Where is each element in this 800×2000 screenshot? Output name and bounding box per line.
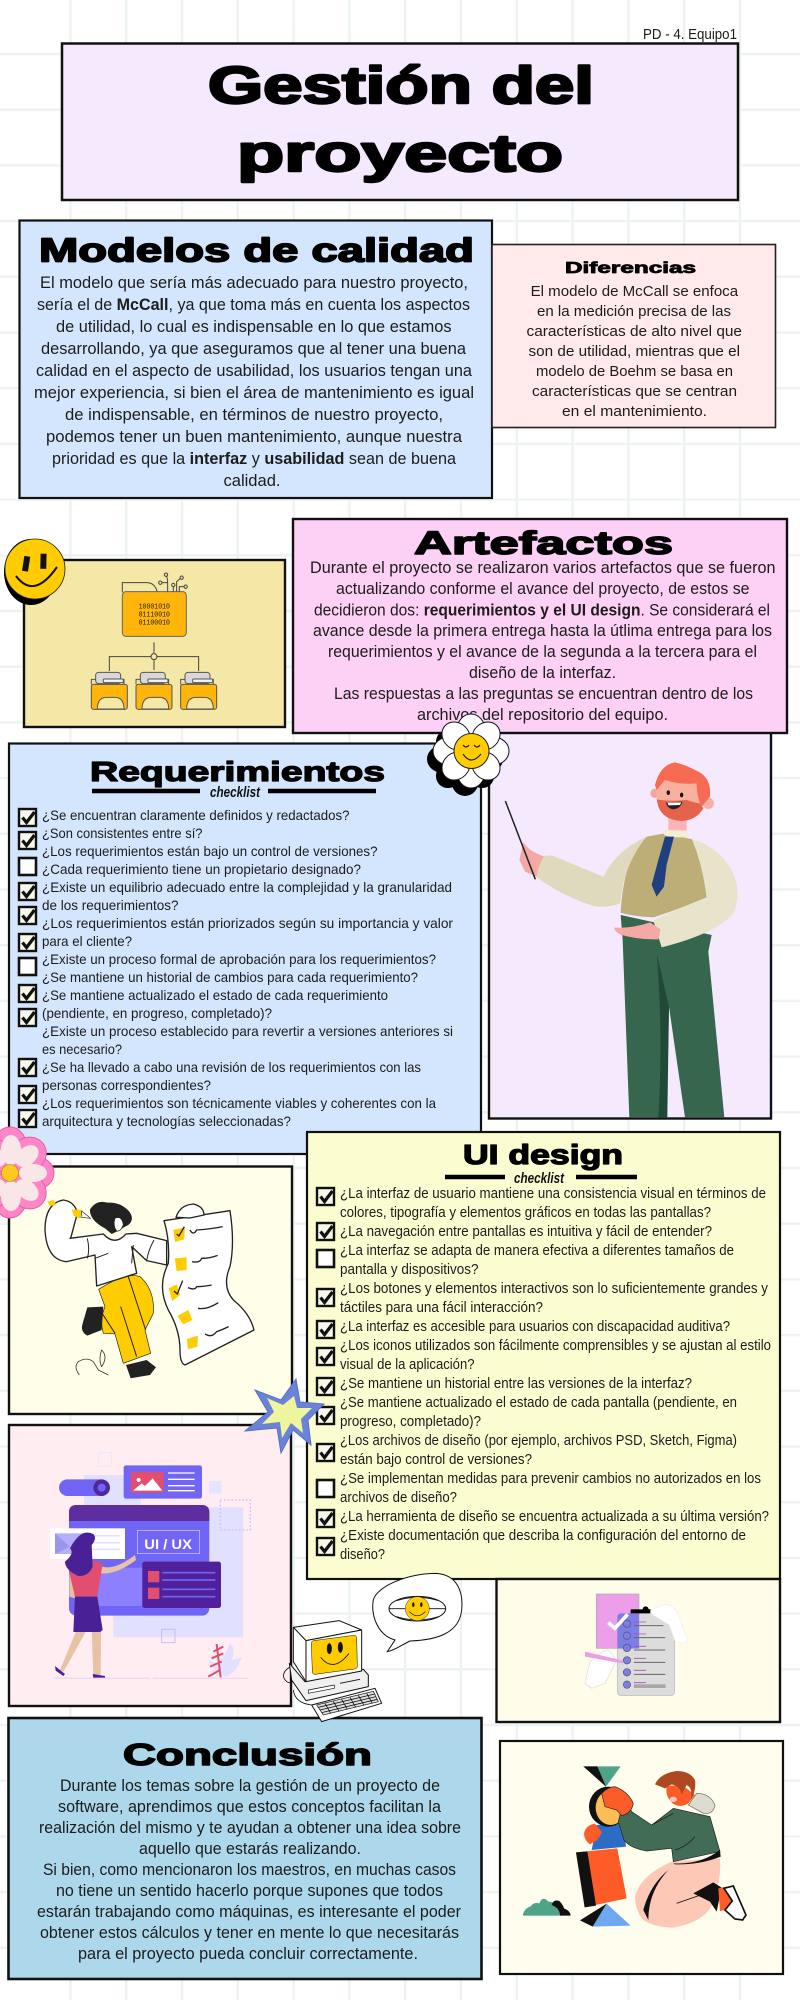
text block: modelos: desarrollando, ya que aseguramos que al tener una buena — [41, 340, 467, 358]
icon: retro computer — [284, 1621, 382, 1722]
checklist text: ¿Se encuentran claramente definidos y redactados? — [42, 808, 350, 823]
illustration: man with pointer — [505, 762, 737, 1117]
checklist text: de los requerimientos? — [42, 898, 179, 913]
illustration: woman with checklist — [45, 1200, 254, 1378]
checklist text: ¿Los requerimientos son técnicamente viables y coherentes con la — [42, 1096, 436, 1111]
icon: smiley sticker — [4, 539, 65, 605]
text block: modelos: El modelo que sería más adecuado para nuestro proyecto, — [40, 274, 468, 292]
text block: modelos: podemos tener un buen mantenimiento, aunque nuestra — [46, 428, 463, 446]
text block: conclusion — [37, 1777, 461, 1963]
checklist text: ¿Se mantiene actualizado el estado de cada pantalla (pendiente, en — [340, 1395, 737, 1411]
checklist text: progreso, completado)? — [340, 1414, 481, 1430]
text block: modelos: prioridad es que la interfaz y usabilidad sean de buena — [52, 450, 457, 468]
text block: conclusion: Si bien, como mencionaron los maestros, en muchas casos — [43, 1861, 456, 1879]
text block: artefactos — [310, 559, 776, 724]
text block: diferencias: en la medición precisa de las — [537, 303, 731, 320]
checklist text: pantalla y dispositivos? — [340, 1262, 478, 1278]
text block: conclusion: aquello que estarás realizando. — [139, 1840, 361, 1858]
checklist text: personas correspondientes? — [42, 1078, 211, 1093]
checklist text: ¿Son consistentes entre sí? — [42, 826, 203, 841]
icon: folder tree: 01100010 — [139, 619, 170, 627]
title — [208, 57, 594, 183]
heading: conclusion: Conclusión — [123, 1737, 372, 1772]
icon: white flower sticker — [427, 714, 509, 796]
text block: modelos: sería el de McCall, ya que toma más en cuenta los aspectos — [37, 296, 470, 314]
checklist text: ¿La interfaz es accesible para usuarios con discapacidad auditiva? — [340, 1319, 730, 1335]
checklist text: arquitectura y tecnologías seleccionadas? — [42, 1114, 291, 1129]
text block: diferencias: en el mantenimiento. — [562, 403, 707, 420]
panel: conclusion — [8, 1718, 482, 1979]
checklist text: ¿Los requerimientos están bajo un control de versiones? — [42, 844, 378, 859]
text block: artefactos: Durante el proyecto se realizaron varios artefactos que se fueron — [310, 559, 776, 577]
heading: diferencias: Diferencias — [565, 260, 696, 277]
text block: modelos: de indispensable, en términos de nuestro proyecto, — [65, 406, 443, 424]
panel: pink ui/ux illustration — [9, 1425, 291, 1706]
checklist text: ¿Los archivos de diseño (por ejemplo, archivos PSD, Sketch, Figma) — [340, 1433, 737, 1449]
checklist text: (pendiente, en progreso, completado)? — [42, 1006, 272, 1021]
checklist text: para el cliente? — [42, 934, 132, 949]
text block: diferencias — [526, 283, 742, 420]
panel: requerimientos checklist — [9, 744, 481, 1154]
icon: folder tree — [91, 573, 217, 709]
checklist text: ¿Existe un proceso establecido para revertir a versiones anteriores si — [42, 1024, 453, 1039]
text block: diferencias: modelo de Boehm se basa en — [536, 363, 733, 380]
icon: pink flower sticker — [0, 1127, 54, 1218]
text block: diferencias: características de alto nivel que — [526, 323, 742, 340]
panel: diferencias — [492, 244, 776, 428]
panel: writer illustration — [9, 1166, 292, 1414]
text block: modelos: calidad. — [224, 472, 280, 490]
illustration: woman with UI/UX screen: UI / UX — [144, 1536, 193, 1552]
checklist text: ¿Los iconos utilizados son fácilmente comprensibles y se ajustan al estilo — [340, 1338, 771, 1354]
icon: star sticker — [245, 1379, 324, 1453]
checklist text: ¿Existe un proceso formal de aprobación para los requerimientos? — [42, 952, 436, 967]
checklist text: ¿Se implementan medidas para prevenir cambios no autorizados en los — [340, 1471, 761, 1487]
text block: conclusion: realización del mismo y te ayudan a obtener una idea sobre — [39, 1819, 461, 1837]
text block: artefactos: Las respuestas a las preguntas se encuentran dentro de los — [334, 685, 753, 703]
checklist text: ¿Existe documentación que describa la configuración del entorno de — [340, 1528, 746, 1544]
checklist text: táctiles para una fácil interacción? — [340, 1300, 543, 1316]
icon: folder tree: 10001010 — [139, 603, 170, 611]
text block: conclusion: Durante los temas sobre la gestión de un proyecto de — [60, 1777, 440, 1795]
title: proyecto — [237, 125, 563, 183]
panel: folder illustration — [24, 560, 285, 727]
text block: modelos: de utilidad, lo cual es indispensable en lo que estamos — [56, 318, 452, 336]
team label: PD - 4. Equipo1 — [643, 27, 737, 43]
checklist text: visual de la aplicación? — [340, 1357, 474, 1373]
text block: artefactos: decidieron dos: requerimientos y el UI design. Se considerará el — [314, 602, 770, 620]
text block: diferencias: características que se centran — [532, 383, 737, 400]
text block: conclusion: no tiene un sentido hacerlo porque supones que todos — [56, 1882, 443, 1900]
panel: title — [62, 44, 738, 200]
text block: diferencias: El modelo de McCall se enfoca — [531, 283, 739, 300]
checklist text: ¿Se mantiene un historial entre las versiones de la interfaz? — [340, 1376, 692, 1392]
text block: conclusion: software, aprendimos que estos conceptos facilitan la — [58, 1798, 442, 1816]
text block: artefactos: avance desde la primera entrega hasta la útlima entrega para los — [313, 622, 772, 640]
checklist text: ¿Los requerimientos están priorizados según su importancia y valor — [42, 916, 453, 931]
title: Gestión del — [208, 57, 594, 115]
checklist text: es necesario? — [42, 1042, 122, 1057]
checklist text: ¿Existe un equilibrio adecuado entre la complejidad y la granularidad — [42, 880, 452, 895]
heading: artefactos: Artefactos — [414, 525, 673, 561]
checklist text: ¿Se mantiene un historial de cambios para cada requerimiento? — [42, 970, 418, 985]
text block: conclusion: obtener estos cálculos y tener en mente lo que necesitarás — [40, 1924, 459, 1942]
panel: presenter illustration — [489, 700, 771, 1118]
checkboxes — [19, 809, 36, 1127]
checklist text: están bajo control de versiones? — [340, 1452, 532, 1468]
text block: conclusion: estarán trabajando como máquinas, es interesante el poder — [37, 1903, 461, 1921]
illustration: person stacking shapes — [523, 1766, 746, 1928]
text block: modelos: calidad en el aspecto de usabilidad, los usuarios tengan una — [36, 362, 473, 380]
text block: artefactos: requerimientos y el avance de la segunda a la tercera para el — [328, 643, 757, 661]
checklist text: colores, tipografía y elementos gráficos en todas las pantallas? — [340, 1205, 711, 1221]
checklist text: ¿Se mantiene actualizado el estado de cada requerimiento — [42, 988, 388, 1003]
illustration: woman with UI/UX screen — [50, 1453, 250, 1678]
checklist text: ¿Se ha llevado a cabo una revisión de los requerimientos con las — [42, 1060, 421, 1075]
text block: modelos — [34, 274, 474, 490]
checklist text: ¿La herramienta de diseño se encuentra actualizada a su última versión? — [340, 1509, 769, 1525]
checklist text — [340, 1186, 771, 1563]
heading: ui design: UI design — [463, 1139, 623, 1170]
checklist text: ¿La interfaz se adapta de manera efectiva a diferentes tamaños de — [340, 1243, 734, 1259]
text block: artefactos: actualizando conforme el avance del proyecto, de estos se — [336, 580, 750, 598]
checklist text: ¿La interfaz de usuario mantiene una consistencia visual en términos de — [340, 1186, 766, 1202]
heading: modelos de calidad: Modelos de calidad — [39, 232, 474, 270]
subtitle: checklist: checklist — [210, 784, 261, 801]
panel: building blocks illustration — [500, 1741, 783, 1974]
checklist text: ¿La navegación entre pantallas es intuitiva y fácil de entender? — [340, 1224, 712, 1240]
illustration: hands filling checklist — [585, 1594, 688, 1696]
icon: folder tree: 01110010 — [139, 611, 170, 619]
panel: clipboard illustration — [496, 1579, 780, 1722]
panel: artefactos — [293, 519, 787, 733]
checklist text: ¿Cada requerimiento tiene un propietario designado? — [42, 862, 361, 877]
text block: artefactos: archivos del repositorio del equipo. — [417, 706, 668, 724]
subtitle: checklist: checklist — [514, 1170, 565, 1187]
panel: modelos de calidad — [20, 220, 492, 498]
text block: diferencias: son de utilidad, mientras que el — [528, 343, 740, 360]
heading: requerimientos: Requerimientos — [90, 756, 385, 787]
checklist text: archivos de diseño? — [340, 1490, 457, 1506]
checkboxes — [317, 1188, 334, 1555]
checklist text: diseño? — [340, 1547, 385, 1563]
text block: conclusion: para el proyecto pueda concluir correctamente. — [78, 1945, 418, 1963]
icon: speech bubble with eye — [373, 1573, 462, 1652]
panel: ui design checklist — [307, 1132, 780, 1579]
checklist text — [42, 808, 453, 1129]
text block: modelos: mejor experiencia, si bien el área de mantenimiento es igual — [34, 384, 474, 402]
checklist text: ¿Los botones y elementos interactivos son lo suficientemente grandes y — [340, 1281, 769, 1297]
text block: artefactos: diseño de la interfaz. — [469, 664, 616, 682]
